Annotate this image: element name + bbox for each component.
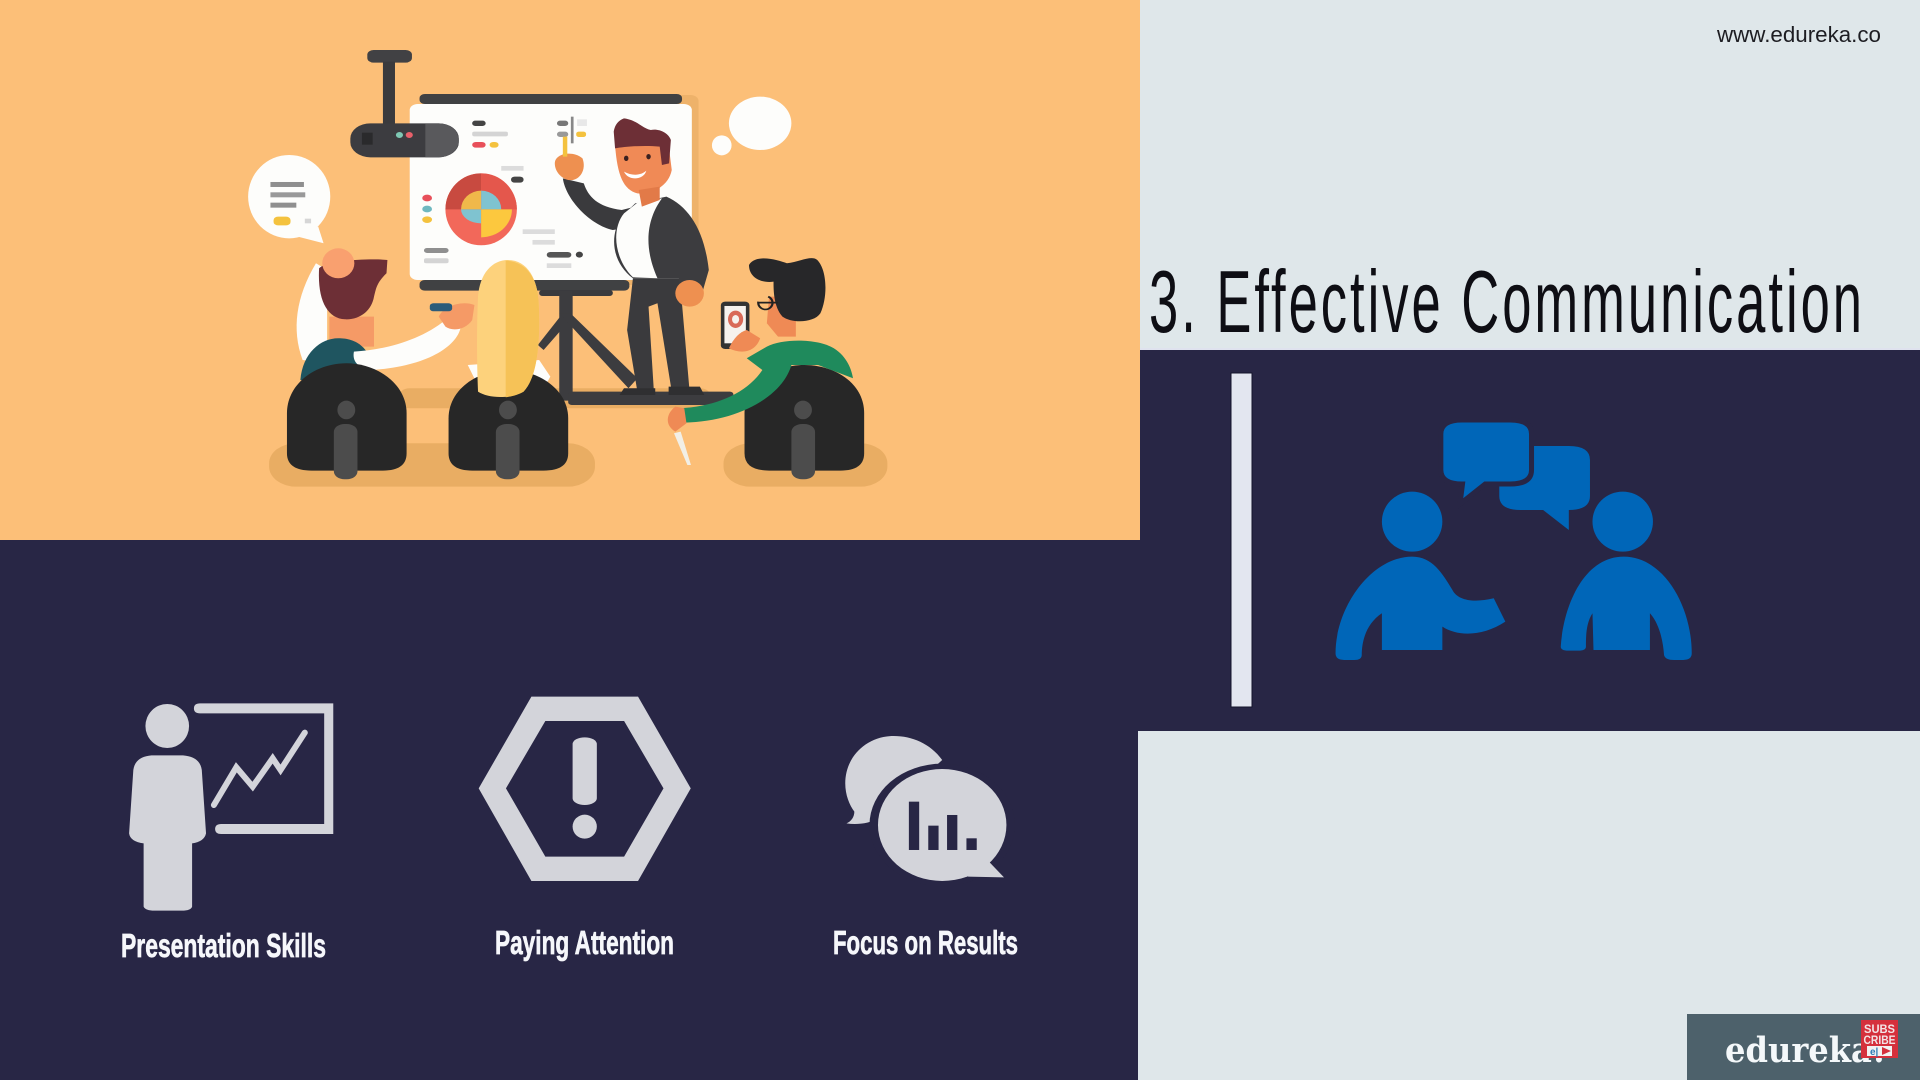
speech bubble left bbox=[1441, 420, 1532, 504]
speech bubble left bbox=[248, 155, 330, 243]
arm bbox=[563, 178, 635, 230]
smile bbox=[624, 171, 646, 178]
subscribe badge: e| bbox=[1870, 1047, 1879, 1058]
person left bbox=[1336, 492, 1505, 660]
logo: edureka: edureka! bbox=[1725, 1030, 1886, 1071]
legs bbox=[627, 278, 690, 392]
presenter bbox=[555, 118, 709, 395]
subscribe badge: CRIBE bbox=[1864, 1033, 1896, 1047]
label: Paying Attention: Paying Attention bbox=[495, 924, 674, 961]
subscribe badge bbox=[1861, 1020, 1898, 1058]
projector bbox=[350, 50, 459, 157]
icon: chat bubbles with bar chart bbox=[845, 736, 1015, 886]
icon: two people talking bbox=[1336, 420, 1692, 660]
hand right bbox=[675, 280, 704, 307]
suit bbox=[614, 197, 709, 293]
panel: dark navy lower left bbox=[0, 540, 1138, 1080]
panel: orange illustration background bbox=[0, 0, 1140, 540]
vertical divider bar bbox=[1231, 373, 1252, 707]
presentation screen bbox=[410, 94, 699, 296]
person middle bbox=[468, 360, 550, 397]
subscribe badge: SUBS bbox=[1864, 1022, 1895, 1036]
icon: presenter with chart board bbox=[129, 703, 333, 911]
label: Presentation Skills: Presentation Skills bbox=[121, 927, 326, 964]
panel: dark navy right band bbox=[1138, 348, 1920, 731]
floor shadows bbox=[269, 388, 887, 487]
blonde hair bbox=[477, 260, 539, 397]
shirt bbox=[616, 198, 662, 278]
illustration: presentation meeting bbox=[248, 50, 887, 487]
hair bbox=[614, 118, 671, 165]
pie chart bbox=[445, 173, 517, 245]
screen text details bbox=[422, 117, 587, 268]
icon: warning hexagon bbox=[479, 697, 691, 881]
head bbox=[615, 145, 672, 194]
website url: www.edureka.co bbox=[1716, 22, 1881, 47]
person right bbox=[1561, 492, 1692, 660]
thought cloud right bbox=[712, 97, 791, 155]
label: Focus on Results: Focus on Results bbox=[833, 924, 1018, 961]
logo: edureka bbox=[1687, 1014, 1920, 1080]
speech bubble right bbox=[1499, 446, 1590, 530]
tripod stand bbox=[538, 291, 733, 405]
person right bbox=[668, 258, 853, 465]
chairs bbox=[287, 363, 864, 479]
hand and pointer bbox=[555, 154, 584, 180]
person left bbox=[297, 248, 474, 380]
